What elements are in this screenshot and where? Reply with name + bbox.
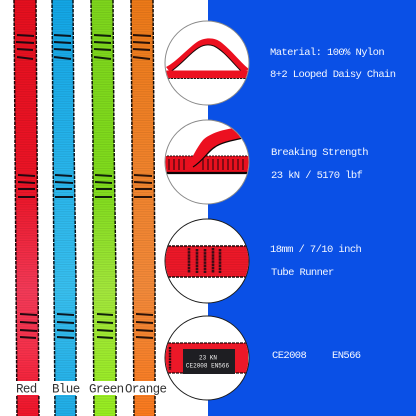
woven label xyxy=(183,349,235,374)
text: size and type xyxy=(270,244,362,279)
blue background panel xyxy=(208,0,416,416)
text: material xyxy=(270,47,396,81)
colour labels: Red xyxy=(16,382,37,396)
text: material: 8+2 Looped Daisy Chain xyxy=(270,69,396,81)
text: breaking strength xyxy=(271,147,368,182)
colour labels: Green xyxy=(89,382,124,396)
colour labels xyxy=(0,381,170,396)
colour labels: Orange xyxy=(125,382,167,396)
red webbing strip xyxy=(14,0,39,416)
woven label: CE2008 EN566 xyxy=(186,362,229,370)
text: breaking strength: 23 kN / 5170 lbf xyxy=(271,170,363,182)
green webbing strip xyxy=(91,0,116,416)
circle: looped daisy chain detail xyxy=(164,21,252,105)
text: size and type: 18mm / 7/10 inch xyxy=(270,244,362,256)
colour labels: Blue xyxy=(52,382,80,396)
circle: certification label detail xyxy=(164,316,249,400)
orange webbing strip xyxy=(131,0,155,416)
woven label: 23 KN xyxy=(199,354,217,362)
text: certifications: CE2008 xyxy=(272,350,307,362)
text: certifications: EN566 xyxy=(332,350,361,362)
text: certifications xyxy=(272,350,361,362)
text: material: Material: 100% Nylon xyxy=(270,47,384,59)
text: breaking strength: Breaking Strength xyxy=(271,147,368,159)
blue webbing strip xyxy=(52,0,76,416)
text: size and type: Tube Runner xyxy=(271,267,334,279)
circle: tube runner stitching detail xyxy=(164,219,250,303)
circle: breaking strength detail xyxy=(164,120,252,204)
